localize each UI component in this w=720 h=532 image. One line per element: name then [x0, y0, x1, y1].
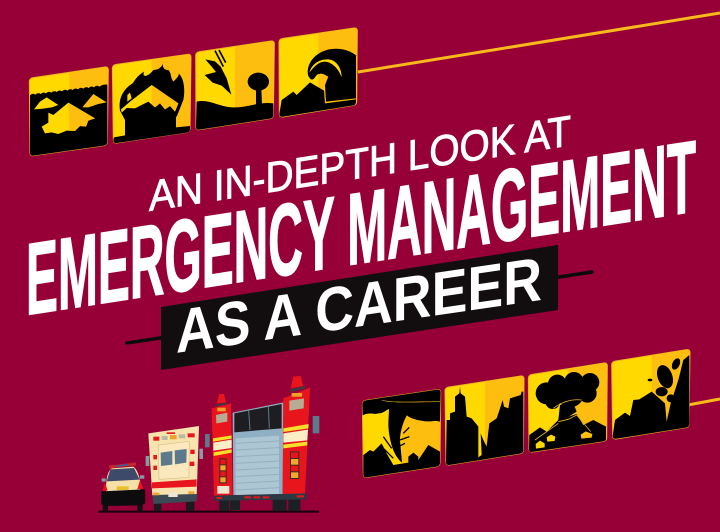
banner: as a career: AS A CAREER	[176, 245, 542, 367]
icon: flood	[29, 67, 108, 156]
title: an in-depth look at: AN IN-DEPTH LOOK AT	[149, 107, 571, 221]
fire truck	[205, 376, 319, 511]
icon: volcano	[528, 363, 607, 452]
police car	[101, 462, 145, 511]
ambulance	[146, 426, 203, 511]
emergency vehicles	[98, 376, 319, 512]
top row: disaster icons	[29, 28, 357, 156]
icon: earthquake city	[445, 376, 524, 465]
icon: tsunami	[279, 28, 357, 117]
bottom row: disaster icons	[362, 350, 690, 477]
icon: house fire	[112, 54, 191, 143]
icon: landslide	[612, 350, 690, 439]
icon: tornado	[362, 390, 441, 477]
icon: plane crash	[196, 41, 274, 130]
